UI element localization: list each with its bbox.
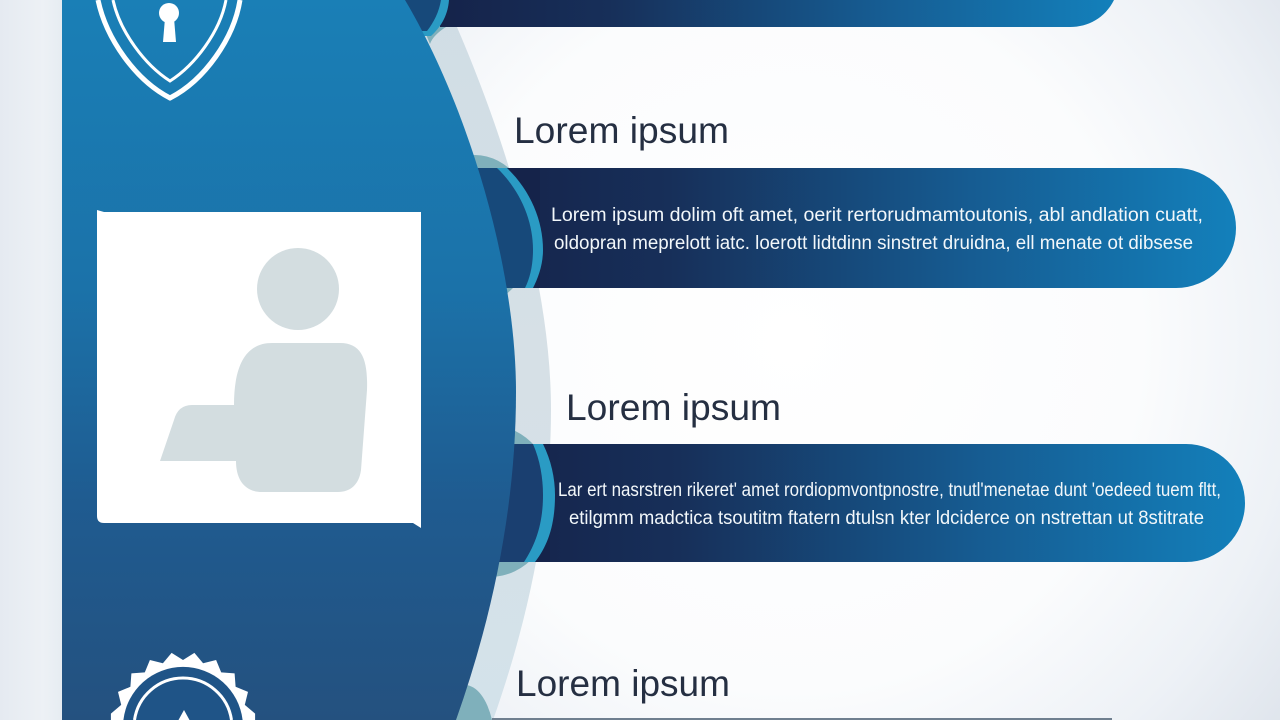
row 3 bar — [490, 444, 1245, 562]
row 4 bar — [492, 718, 1112, 720]
row 3 connector halo — [425, 425, 555, 577]
row 2: heading: Lorem ipsum — [514, 110, 729, 151]
icon: award badge — [111, 653, 255, 720]
row 3: description bar: etilgmm madctica tsoutitm ftatern dtulsn kter ldciderce on nstrettan ut 8stitrate — [569, 508, 1204, 529]
row 1 connector ring — [405, 0, 449, 36]
row 4: description bar — [440, 685, 1112, 720]
left background strip — [0, 0, 62, 720]
badge star tip — [178, 710, 190, 720]
row 4: heading: Lorem ipsum — [516, 663, 730, 704]
icon: shield with keyhole — [98, 0, 240, 98]
row 4 connector halo — [440, 685, 492, 720]
row 2: description bar — [415, 155, 1236, 305]
row 2 connector halo — [415, 155, 535, 305]
profile card — [97, 210, 421, 528]
row 3 connector ring — [480, 444, 555, 562]
row 2: description bar: oldopran meprelott iatc. loerott lidtdinn sinstret druidna, ell menate ot dibsese — [554, 233, 1193, 254]
row 3: description bar — [425, 425, 1245, 577]
row 1 bar — [440, 0, 1114, 27]
row 2 bar — [480, 168, 1236, 288]
badge scalloped edge — [111, 653, 255, 720]
row 2 connector — [470, 168, 533, 288]
row 2 connector ring — [470, 168, 543, 288]
row 1 connector — [405, 0, 441, 31]
profile body — [160, 343, 367, 492]
row 3: heading: Lorem ipsum — [566, 387, 781, 428]
badge inner ring — [134, 678, 232, 720]
row 1: description bar — [405, 0, 1114, 44]
row 2 text: Lorem ipsum dolim oft amet, oerit rertorudmamtoutonis, abl andlation cuatt, — [551, 205, 1203, 226]
profile head — [257, 248, 339, 330]
row 3 connector — [480, 444, 543, 562]
main blue panel — [62, 0, 516, 720]
grey crescent behind main panel — [400, 0, 551, 720]
badge inner disc — [123, 667, 243, 720]
card background — [97, 210, 421, 528]
row 1 connector halo — [420, 20, 446, 44]
